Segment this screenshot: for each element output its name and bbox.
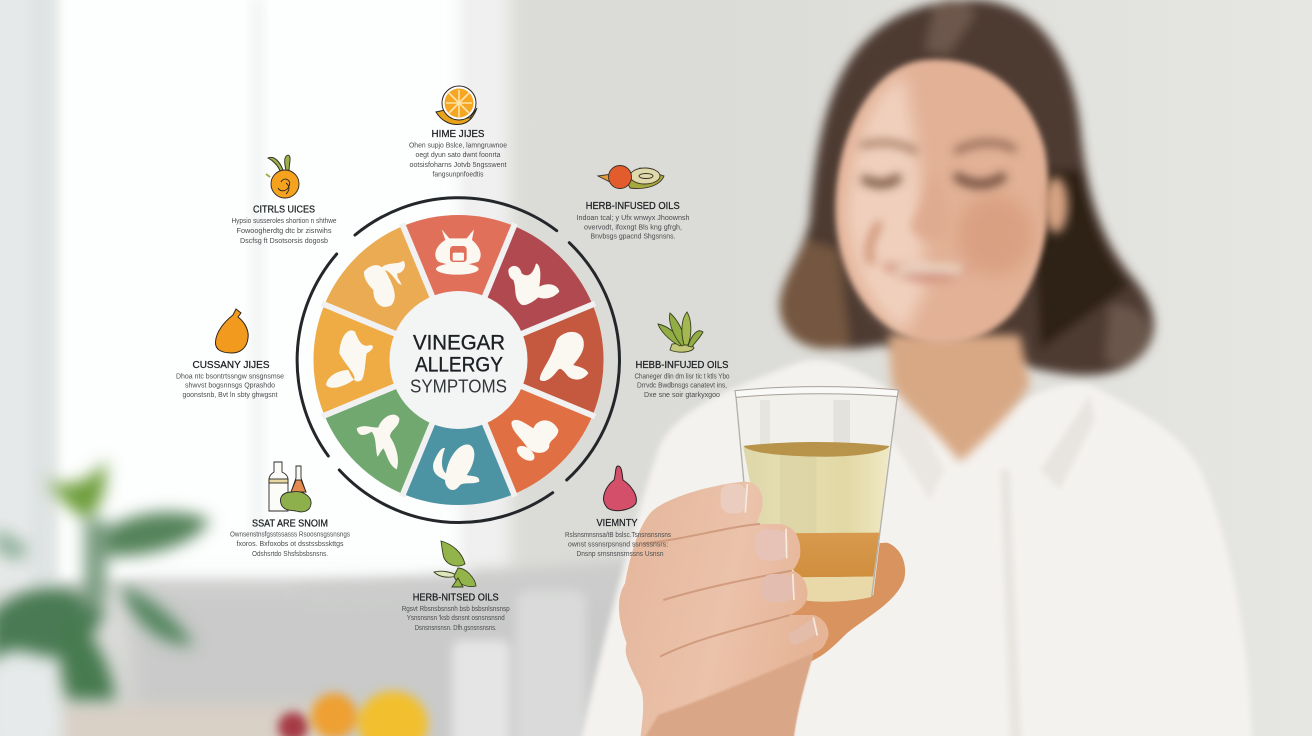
callout: bottom: Ysnsnsnsn 'ksb dsnsnt osnsnsnsnd — [407, 613, 505, 622]
callout: upper right: Indoan tcal; y Ufx wnwyx Jhoownsh — [576, 213, 690, 222]
wheel: center title: ALLERGY — [415, 354, 503, 377]
callout: lower right: Rslsnsmnsnsa/tB bslsc.Tsnsnsnsnsns — [565, 530, 671, 539]
blurred plant — [0, 460, 210, 700]
callout: right: Chaneger dlin dm lisr tic t ktls Ybo — [634, 372, 730, 381]
blurred fruit — [278, 691, 428, 736]
icon: orange gourd — [215, 309, 248, 353]
wheel: segment icons — [326, 229, 588, 490]
callout: lower left: SSAT ARE SNOIM — [252, 518, 328, 529]
callout: lower right — [565, 466, 671, 558]
hand behind glass: thumb and palm — [760, 543, 905, 663]
icon: left segment — [326, 330, 373, 388]
wheel: outer ring arcs — [297, 198, 619, 522]
callout: upper left — [232, 155, 336, 245]
callout: lower left: Odshsrtdo Shsfsbsbsnsns. — [252, 549, 328, 558]
woman: hair — [780, 0, 1154, 375]
callout: left: goonstsnb, Bvt ln sbty ghwgsnt — [182, 390, 278, 399]
callout: top center: oegt dyun sato dwnt foonrta — [416, 150, 501, 159]
callout: bottom: HERB-NITSED OILS — [413, 592, 499, 603]
callout: lower right: Dnsnp srnsnsnsrnssns Usnsn — [576, 549, 664, 558]
icon: lower right segment — [512, 420, 558, 464]
callout: top center: HIME JIJES — [432, 129, 485, 140]
callout: right — [634, 312, 730, 399]
icon: bottles and greens — [269, 462, 311, 512]
callout: top center: fangsunpnfoedtis — [432, 170, 484, 178]
icon: tomato and melon — [598, 166, 664, 188]
callout: bottom: Rgsvt Rbsnsbsnsnh bsb bsbsnlsnsnsp — [402, 604, 510, 613]
glass of vinegar — [735, 387, 898, 602]
callout: left: shwvst bogsnnsgs Qprashdo — [185, 381, 275, 390]
callout: upper left: CITRLS UICES — [253, 205, 315, 216]
callout: lower left: fxoros. Bxfoxobs ot dsstssbsskttgs — [236, 539, 344, 548]
icon: bottom segment — [433, 445, 479, 490]
callout: upper right: Bnvbsgs gpacnd Shgsnsns. — [590, 232, 676, 241]
wheel: center title — [410, 332, 507, 396]
icon: herb sprig — [434, 541, 476, 587]
wheel: center title: VINEGAR — [413, 332, 505, 354]
icon: lower left segment — [357, 415, 399, 469]
callout: lower right: ownst sssnsrpsnsnd ssnsssnsrs: — [568, 540, 668, 548]
icon: upper left segment — [364, 261, 405, 307]
callout: right: Dxe sne soir gtarkyxgoo — [644, 390, 720, 399]
blurred bottles — [452, 590, 586, 736]
hand: fingers — [619, 482, 829, 736]
callout: lower left: Ownsenstnsfgsstssasss Rsoosnsgssnsngs — [230, 530, 350, 538]
icon: aloe plant — [658, 312, 703, 352]
callout: right: HEBB-INFUJED OILS — [636, 360, 729, 371]
callout: top center: ootsisfoharns Jotvb 5ngsswent — [410, 160, 507, 169]
wheel: segments — [313, 215, 604, 505]
callout: left — [176, 309, 284, 399]
callout: upper right: HERB-INFUSED OILS — [586, 201, 680, 212]
callout: lower left — [230, 462, 350, 558]
callout: bottom: Dsnsnsnsnsn. Dfh.gsnsnsnsns. — [415, 623, 497, 632]
icon: top segment — [435, 229, 481, 275]
woman: shirt — [580, 360, 1252, 736]
callout: upper right: overvodt, ifoxngt Bls kng gfrgh, — [584, 222, 682, 231]
symptoms wheel — [297, 198, 619, 522]
callout: left: Dhoa ntc bsontrtssngw snsgnsmse — [176, 372, 284, 381]
icon: orange slice — [436, 86, 477, 124]
callout: top center — [409, 86, 507, 178]
callout: upper left: Hypsio susseroles shortion n shthwe — [232, 216, 336, 225]
woman: face — [836, 60, 1068, 344]
callout: upper left: Fowoogherdtg dtc br zisrwihs — [236, 226, 332, 235]
icon: red fig — [604, 466, 636, 511]
icon: citrus sprout — [266, 155, 299, 198]
callout: bottom — [402, 541, 510, 632]
callout: lower right: VIEMNTY — [596, 518, 638, 529]
woman: neck — [888, 335, 1030, 462]
icon: upper right segment — [508, 263, 559, 305]
icon: right segment — [540, 332, 588, 381]
wheel: center title: SYMPTOMS — [410, 376, 507, 396]
callout: upper right — [576, 166, 690, 241]
callout: right: Drrvdc Bwdbnsgs canatevt ins, — [637, 381, 727, 390]
callout: left: CUSSANY JIJES — [192, 360, 270, 371]
callout: upper left: Dscfsg ft Dsotsorsis dogosb — [240, 236, 328, 245]
callout: top center: Ohen supjo Bslce, lamngruwnoe — [409, 140, 507, 150]
